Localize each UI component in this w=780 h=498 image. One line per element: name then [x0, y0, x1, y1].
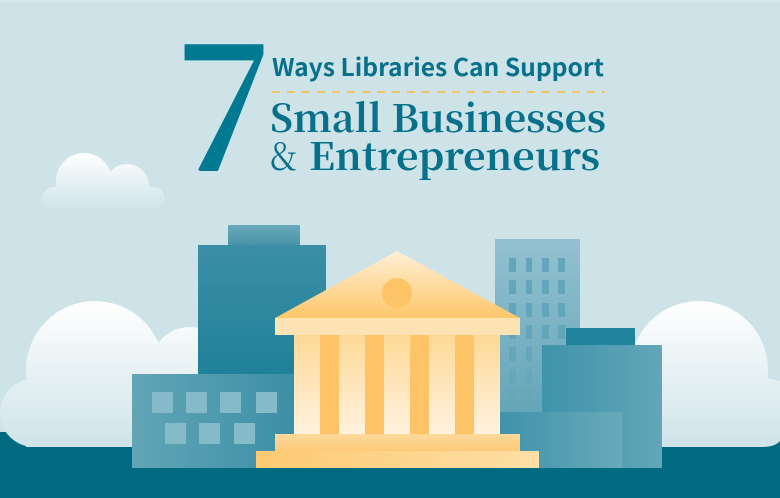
pediment circle [382, 278, 412, 308]
title line: Ways Libraries Can Support: Ways Libraries Can Support [272, 48, 604, 83]
title line: Small Businesses: Small Businesses [270, 88, 606, 143]
left cloud [0, 301, 230, 447]
title line: & Entrepreneurs: Entrepreneurs [309, 126, 600, 181]
upper step [275, 434, 520, 451]
right building [500, 328, 662, 468]
small cloud [42, 153, 165, 211]
dashed divider [272, 91, 605, 93]
ground [0, 432, 780, 498]
right cloud [630, 301, 780, 447]
tall dark building [198, 225, 326, 380]
title line: & Entrepreneurs: & [270, 126, 297, 181]
pediment [275, 251, 520, 318]
pale tower with windows [495, 239, 580, 414]
lower step [256, 451, 539, 468]
low left building with windows [132, 374, 302, 468]
library temple [256, 251, 539, 468]
columns [294, 335, 500, 434]
entablature [275, 318, 520, 335]
